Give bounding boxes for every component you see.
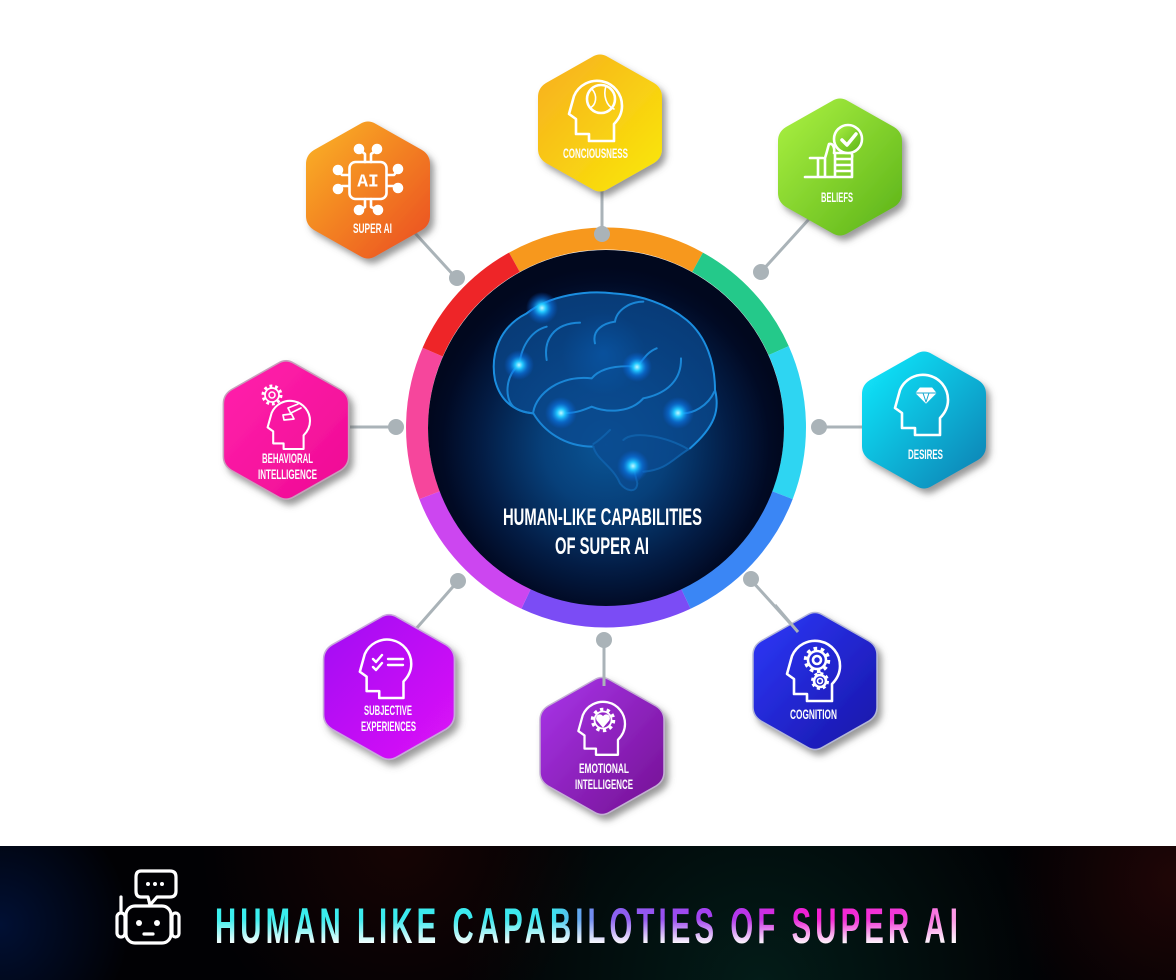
icon: thumbs up with check — [805, 125, 862, 177]
node: beliefs — [778, 98, 902, 236]
label: CONCIOUSNESS — [563, 145, 628, 161]
top connector dot over ring — [594, 226, 610, 242]
icon: head with gear — [263, 386, 310, 449]
label: SUBJECTIVE — [364, 702, 412, 718]
node: behavioral intelligence — [223, 361, 349, 499]
icon: head with gears — [787, 641, 840, 701]
label: BEHAVIORAL — [262, 450, 313, 466]
label: COGNITION — [790, 706, 837, 722]
label — [258, 450, 317, 482]
bottom banner — [0, 846, 1176, 980]
connector: super AI — [414, 232, 465, 286]
icon: head with checklist — [360, 640, 411, 698]
label — [575, 760, 633, 792]
connector: emotional intelligence — [596, 632, 612, 686]
icon: AI chip — [334, 145, 402, 214]
connector: behavioral intelligence — [350, 419, 404, 435]
brain illustration — [494, 292, 717, 490]
node: cognition — [753, 605, 877, 750]
node: emotional intelligence — [540, 674, 664, 814]
label: INTELLIGENCE — [258, 466, 317, 482]
node: desires — [862, 352, 986, 488]
center title — [503, 504, 702, 560]
connector: beliefs — [753, 218, 810, 280]
node: super AI — [306, 122, 430, 258]
icon: head with brain ball — [569, 81, 622, 141]
center title: HUMAN-LIKE CAPABILITIES — [503, 504, 702, 531]
connector: cognition — [743, 571, 798, 632]
connector: desires — [811, 419, 866, 435]
label: DESIRES — [908, 446, 943, 462]
node: consciousness — [538, 54, 662, 192]
connector: subjective experiences — [415, 573, 466, 630]
node: super AI: AI — [357, 172, 379, 192]
label: BELIEFS — [821, 189, 853, 205]
node: subjective experiences — [324, 615, 454, 759]
label: EXPERIENCES — [361, 718, 416, 734]
central dark disc — [428, 250, 784, 606]
label: EMOTIONAL — [579, 760, 629, 776]
icon: head with diamond — [895, 375, 948, 435]
center title: OF SUPER AI — [555, 533, 649, 560]
label — [361, 702, 416, 734]
connector: consciousness — [594, 190, 610, 242]
label: SUPER AI — [353, 220, 392, 236]
central ring — [417, 239, 795, 617]
icon: head with gear heart — [578, 702, 625, 755]
icon: robot with speech bubble — [117, 871, 179, 943]
label: INTELLIGENCE — [575, 776, 633, 792]
